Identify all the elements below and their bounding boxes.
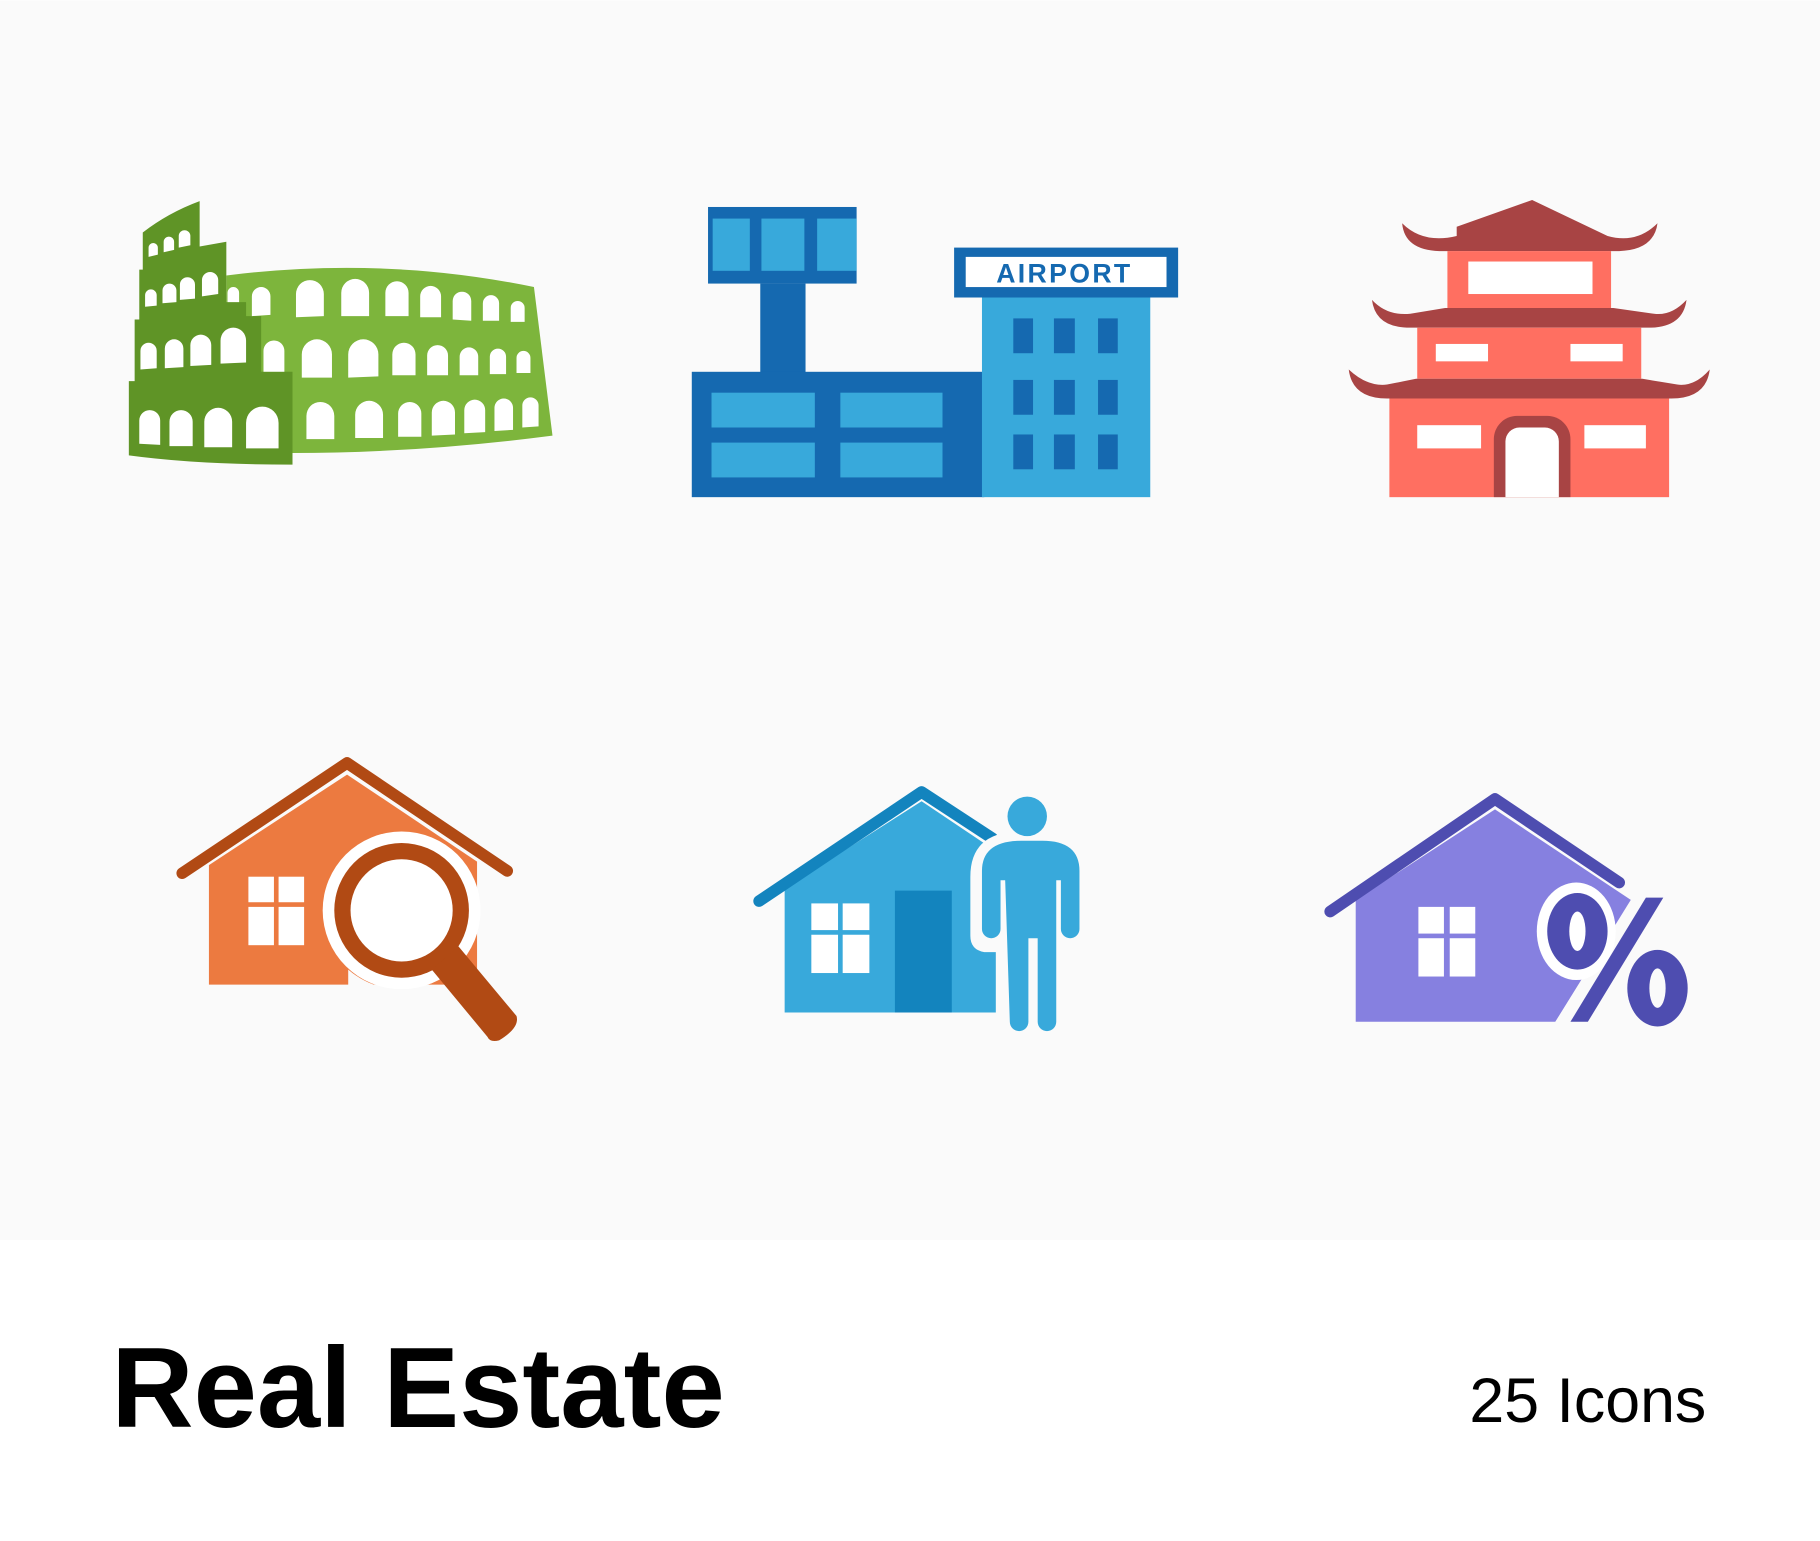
- icon: house search: [182, 763, 517, 1041]
- icon: house person: [759, 792, 1086, 1036]
- icon: colosseum: [129, 201, 552, 465]
- icon: airport: AIRPORT: [996, 258, 1133, 288]
- icon: airport: [692, 207, 1178, 497]
- title: Real Estate: [111, 1325, 725, 1452]
- icon: house discount: [1330, 799, 1688, 1026]
- icon: pagoda: [1349, 200, 1710, 497]
- subtitle: icon count: 25 Icons: [1469, 1366, 1706, 1436]
